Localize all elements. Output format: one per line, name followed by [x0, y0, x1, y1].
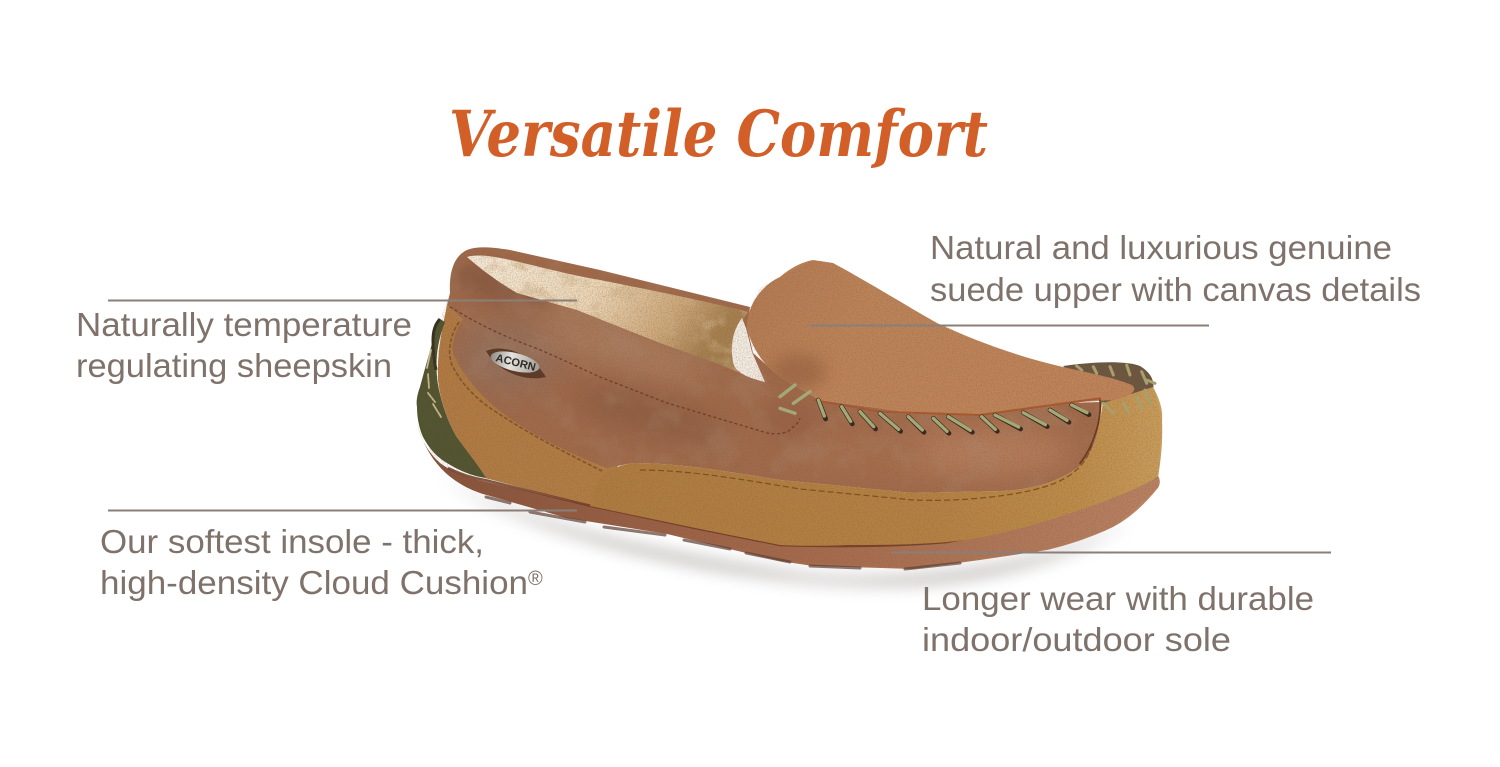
tread lugs	[486, 497, 960, 569]
outsole	[417, 423, 1160, 569]
suede shadow near stitching	[770, 354, 826, 390]
leather shading	[440, 245, 1110, 495]
callout: insole	[100, 510, 577, 601]
callout text	[76, 306, 412, 384]
metal logo plate	[486, 347, 546, 378]
texture overlay	[415, 245, 1165, 575]
leader line	[810, 324, 1209, 326]
leader line	[892, 552, 1331, 554]
heel panel seam	[450, 322, 604, 472]
leader line	[108, 510, 577, 512]
moccasin stitching	[780, 365, 1155, 463]
callout text	[100, 523, 543, 601]
callout: suede upper	[810, 229, 1421, 326]
collar seam stitching	[450, 307, 800, 434]
fleece lining	[467, 256, 748, 372]
green heel patch	[417, 319, 486, 478]
green patch dark edge	[433, 319, 440, 370]
heel canvas panel	[438, 305, 640, 506]
callout text: suede upper with canvas details	[930, 271, 1421, 308]
callout text: ®	[528, 568, 543, 590]
vamp canvas panel	[590, 387, 1162, 546]
callout text: high-density Cloud Cushion	[100, 564, 528, 601]
callout text	[922, 580, 1314, 658]
metal logo plate: ACORN	[494, 352, 537, 374]
callout: sole	[892, 552, 1331, 658]
green patch stitching	[427, 350, 441, 417]
toe rim interior	[1063, 362, 1153, 410]
callout text: Longer wear with durable	[922, 580, 1314, 617]
sole welt shadow line	[448, 468, 1158, 546]
leader line	[108, 300, 577, 302]
callout text: Our softest insole - thick,	[100, 523, 484, 560]
suede vamp	[747, 260, 1134, 415]
white fleece at vamp	[732, 318, 765, 382]
side leather panel	[447, 247, 1102, 493]
vamp canvas seam	[640, 445, 1092, 500]
fleece texture	[480, 256, 748, 372]
callout text: regulating sheepskin	[76, 347, 392, 384]
callout text: indoor/outdoor sole	[922, 621, 1231, 658]
callout text	[930, 229, 1421, 308]
callout text: Natural and luxurious genuine	[930, 229, 1392, 266]
callout text: Naturally temperature	[76, 306, 412, 343]
callout: sheepskin	[76, 300, 577, 384]
shoe illustration	[415, 245, 1165, 584]
ground shadow	[440, 475, 1130, 584]
title: Versatile Comfort	[449, 97, 988, 172]
